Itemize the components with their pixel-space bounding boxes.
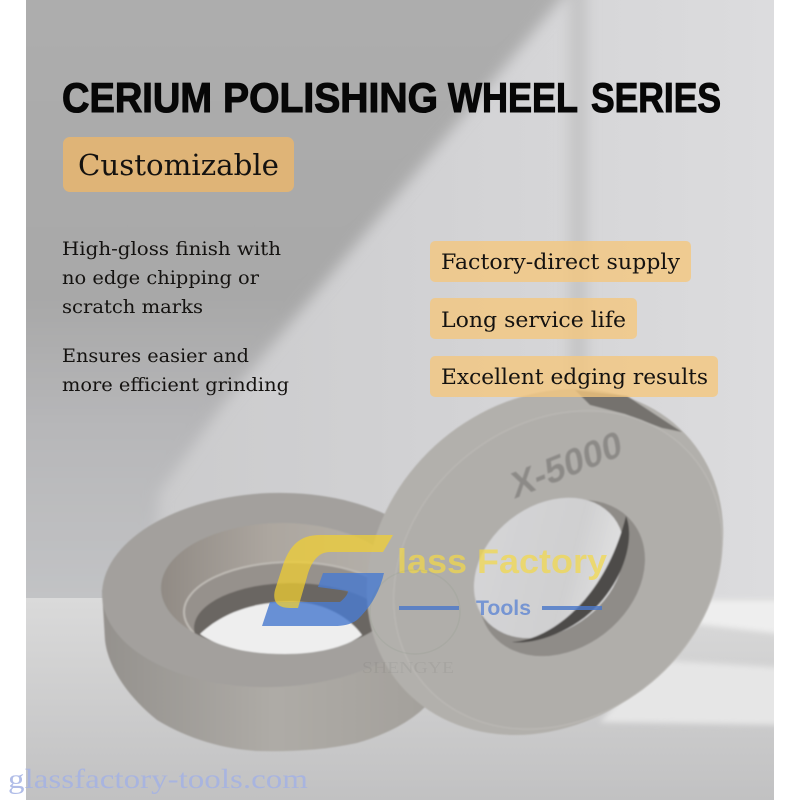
text block: finish	[62, 238, 281, 318]
left wheel lying flat	[99, 487, 447, 751]
badge: excellent edging results: Excellent edging results	[441, 365, 708, 389]
badge: excellent edging results	[430, 356, 718, 397]
watermark word Factory: lass Factory	[397, 543, 607, 581]
text block: grinding	[62, 345, 289, 396]
title: WHEEL	[448, 74, 578, 121]
right wheel hole shading	[448, 467, 676, 689]
right wheel outer face	[297, 317, 793, 800]
title: SERIES	[591, 74, 721, 121]
faint watermark: Shengye: SHENGYE	[362, 658, 454, 677]
text block: grinding: more efficient grinding	[62, 374, 289, 396]
badge: factory-direct supply: Factory-direct supply	[441, 250, 680, 274]
badge: factory-direct supply	[430, 241, 691, 282]
left wheel inner step	[182, 561, 360, 633]
faint watermark: Shengye	[362, 570, 460, 677]
engraved model number: X-5000	[508, 422, 625, 507]
left wheel dark ring	[194, 583, 372, 640]
title	[62, 74, 721, 121]
right wheel dark inner edge	[512, 516, 629, 643]
text block: grinding: Ensures easier and	[62, 345, 249, 367]
badge: customizable: Customizable	[78, 148, 279, 182]
logo G blue part	[262, 573, 384, 626]
logo G yellow part	[274, 535, 393, 608]
left wheel outer side	[102, 590, 445, 751]
watermark lines	[399, 606, 602, 610]
title: CERIUM	[62, 74, 212, 121]
title: POLISHING	[223, 74, 438, 121]
left wheel through hole	[200, 602, 362, 654]
watermark word Tools: Tools	[476, 597, 531, 620]
text block: finish: scratch marks	[62, 296, 203, 318]
badge: long service life	[430, 298, 637, 339]
watermark logo: Glass Factory Tools	[262, 535, 607, 626]
right wheel standing	[297, 317, 793, 800]
badge: customizable	[63, 137, 294, 192]
right wheel back rim wedge	[575, 390, 682, 432]
left wheel countersink	[160, 524, 372, 640]
website watermark: glassfactory-tools.com	[8, 764, 308, 794]
right wheel inner face	[329, 345, 787, 795]
left wheel top face	[99, 487, 447, 693]
badge: long service life: Long service life	[441, 308, 626, 332]
text block: finish: High-gloss finish with	[62, 238, 281, 260]
text block: finish: no edge chipping or	[62, 267, 260, 289]
right wheel hole opening	[446, 469, 652, 667]
